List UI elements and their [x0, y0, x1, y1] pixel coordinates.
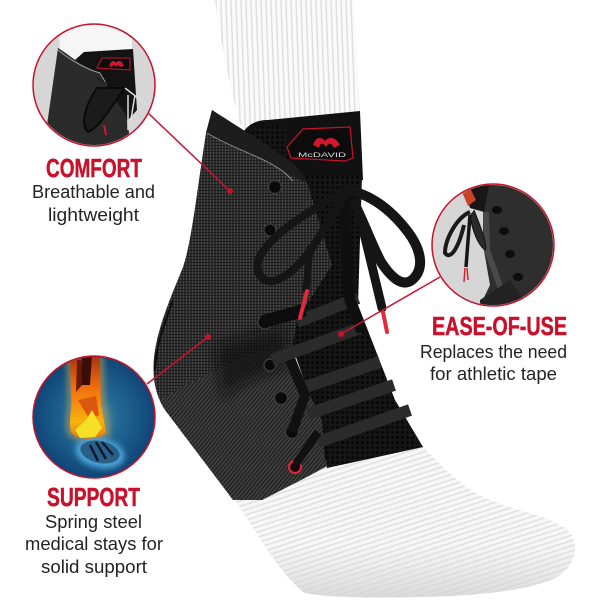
side panel	[153, 110, 332, 500]
support circle image: glowing ankle bones	[33, 355, 155, 478]
comfort circle image	[33, 20, 155, 150]
ease-of-use description: for athletic tape	[430, 364, 557, 384]
eyelet edge	[155, 300, 326, 460]
foot sock	[235, 443, 575, 598]
comfort leader line	[147, 112, 233, 194]
support description	[25, 512, 163, 577]
comfort description: lightweight	[48, 205, 139, 225]
red eyelet	[289, 461, 301, 473]
callout: comfort	[32, 20, 233, 225]
support description: medical stays for	[25, 534, 163, 554]
support description: solid support	[41, 557, 147, 577]
tongue with logo	[242, 111, 363, 182]
ease-of-use circle image	[432, 180, 560, 312]
crossed laces	[262, 190, 410, 464]
ease-of-use description	[420, 342, 567, 384]
callout: ease of use	[338, 180, 567, 384]
stitch line on cuff	[207, 133, 293, 181]
comfort description: Breathable and	[32, 182, 155, 202]
support description: Spring steel	[45, 512, 142, 532]
lace tips	[300, 291, 387, 332]
ease-of-use leader line	[338, 277, 440, 337]
lower panel weave	[160, 345, 327, 500]
callout: support	[25, 334, 211, 577]
upper sock	[215, 0, 360, 140]
tongue with logo: McDAVID	[298, 152, 346, 159]
mesh lacing area	[290, 176, 423, 468]
comfort description	[32, 182, 155, 225]
support leader line	[147, 334, 211, 384]
ankle crease shadow	[215, 325, 290, 400]
main product: ankle brace on foot	[153, 0, 575, 598]
cuff band	[206, 110, 306, 183]
ease-of-use description: Replaces the need	[420, 342, 567, 362]
support heading: SUPPORT	[47, 482, 140, 512]
eyelets	[258, 180, 298, 438]
comfort heading: COMFORT	[46, 153, 142, 183]
lace bow	[257, 190, 420, 308]
